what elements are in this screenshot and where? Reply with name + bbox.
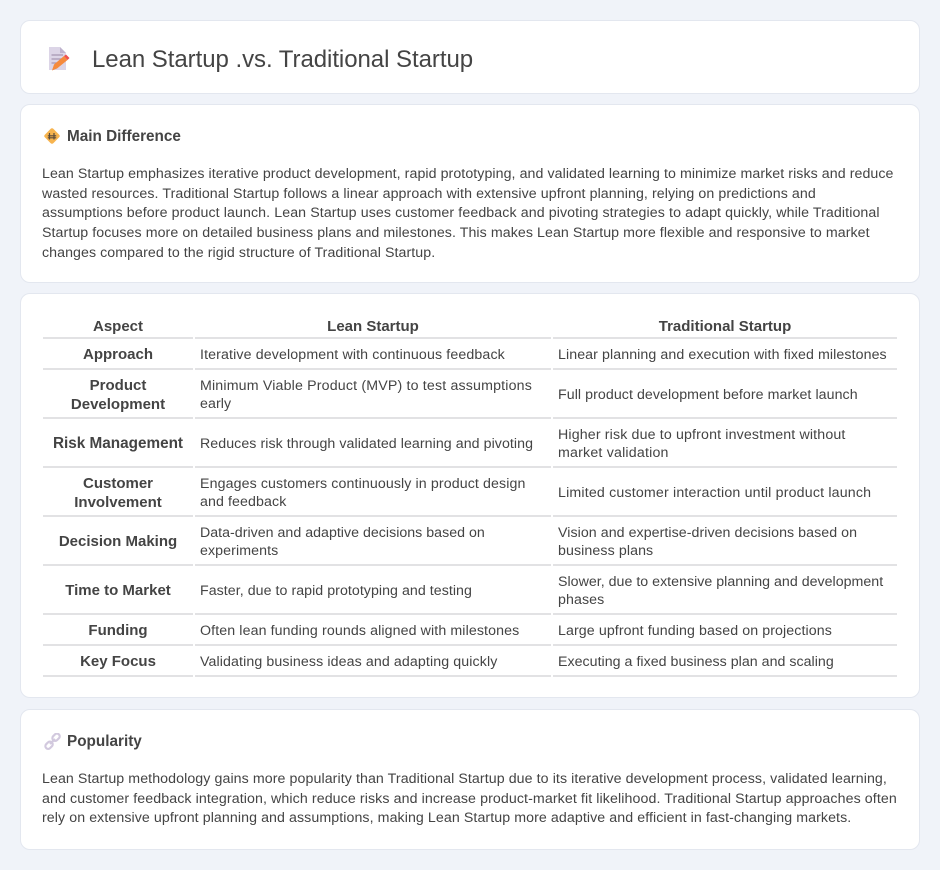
- title: Lean Startup .vs. Traditional Startup: [92, 46, 473, 73]
- row: customer involvement: and feedback: [200, 494, 286, 510]
- row: time to market: Time to Market: [65, 582, 171, 599]
- row: time to market: phases: [558, 592, 604, 608]
- table header: Traditional Startup: [659, 318, 791, 335]
- row: decision making: [59, 525, 857, 559]
- heading: main difference: Main Difference: [67, 128, 181, 145]
- text block: popularity: and customer feedback integration, which reduce risks and increase product-market fit likelihood. Traditional Startup approaches often: [42, 791, 897, 807]
- row: funding: Funding: [88, 622, 148, 639]
- row: product development: Development: [71, 396, 165, 413]
- row: key focus: [80, 653, 834, 670]
- row: decision making: Decision Making: [59, 533, 177, 550]
- text block: popularity: Lean Startup methodology gains more popularity than Traditional Startup due to its iterative development process, validated learning,: [42, 771, 887, 787]
- row: approach: Linear planning and execution with fixed milestones: [558, 347, 887, 363]
- row: decision making: experiments: [200, 543, 278, 559]
- row: customer involvement: [74, 475, 871, 511]
- row: key focus: Executing a fixed business plan and scaling: [558, 654, 834, 670]
- row: risk management: Risk Management: [53, 435, 183, 452]
- text block: popularity: rely on extensive upfront planning and assumptions, making Lean Startup more adaptive and efficient in fast-changing markets.: [42, 810, 851, 826]
- icon: chain link: [44, 733, 61, 750]
- text block: main difference: Startup focuses more on detailed business plans and milestones. This makes Lean Startup more flexible and responsive to market: [42, 225, 870, 241]
- row: decision making: business plans: [558, 543, 653, 559]
- row: approach: Iterative development with continuous feedback: [200, 347, 505, 363]
- row: risk management: [53, 427, 846, 461]
- panel: comparison table: [20, 293, 920, 698]
- row: decision making: Vision and expertise-driven decisions based on: [558, 525, 857, 541]
- row: key focus: Key Focus: [80, 653, 156, 670]
- panel: header: [20, 20, 920, 94]
- row: customer involvement: Involvement: [74, 494, 162, 511]
- table header: Lean Startup: [327, 318, 419, 335]
- row: funding: Large upfront funding based on projections: [558, 623, 832, 639]
- row: product development: Full product development before market launch: [558, 387, 858, 403]
- row: product development: early: [200, 396, 231, 412]
- row: decision making: Data-driven and adaptive decisions based on: [200, 525, 485, 541]
- row: funding: Often lean funding rounds aligned with milestones: [200, 623, 519, 639]
- row: approach: Approach: [83, 346, 153, 363]
- table header: [93, 318, 791, 335]
- panel: main difference: [20, 104, 920, 283]
- text block: main difference: Lean Startup emphasizes iterative product development, rapid prototyping, and validated learning to minimize market risks and reduce: [42, 166, 894, 182]
- row: product development: [71, 377, 858, 413]
- text block: main difference: assumptions before product launch. Lean Startup uses customer feedback and pivoting strategies to adapt quickly, while Traditional: [42, 205, 880, 221]
- row: risk management: Reduces risk through validated learning and pivoting: [200, 436, 533, 452]
- row: risk management: market validation: [558, 445, 669, 461]
- row: risk management: Higher risk due to upfront investment without: [558, 427, 846, 443]
- row: customer involvement: Limited customer interaction until product launch: [558, 485, 871, 501]
- heading: popularity: Popularity: [67, 733, 142, 750]
- row: customer involvement: Customer: [83, 475, 153, 492]
- panel: popularity: [20, 709, 920, 850]
- table header: Aspect: [93, 318, 143, 335]
- row: time to market: [65, 574, 884, 608]
- icon: document with pencil: [49, 47, 70, 70]
- text block: main difference: wasted resources. Traditional Startup follows a linear approach with extensive upfront planning, relying on predictions and: [42, 186, 816, 202]
- text block: main difference: changes compared to the rigid structure of Traditional Startup.: [42, 245, 435, 261]
- icon: warning diamond: [44, 128, 60, 144]
- row: product development: Minimum Viable Product (MVP) to test assumptions: [200, 378, 532, 394]
- text block: main difference: [42, 166, 894, 261]
- row: funding: [88, 622, 832, 639]
- row: time to market: Faster, due to rapid prototyping and testing: [200, 583, 472, 599]
- row: approach: [83, 346, 887, 363]
- row: time to market: Slower, due to extensive planning and development: [558, 574, 883, 590]
- row: customer involvement: Engages customers continuously in product design: [200, 476, 525, 492]
- row: product development: Product: [90, 377, 146, 394]
- row: key focus: Validating business ideas and adapting quickly: [200, 654, 497, 670]
- text block: popularity: [42, 771, 897, 826]
